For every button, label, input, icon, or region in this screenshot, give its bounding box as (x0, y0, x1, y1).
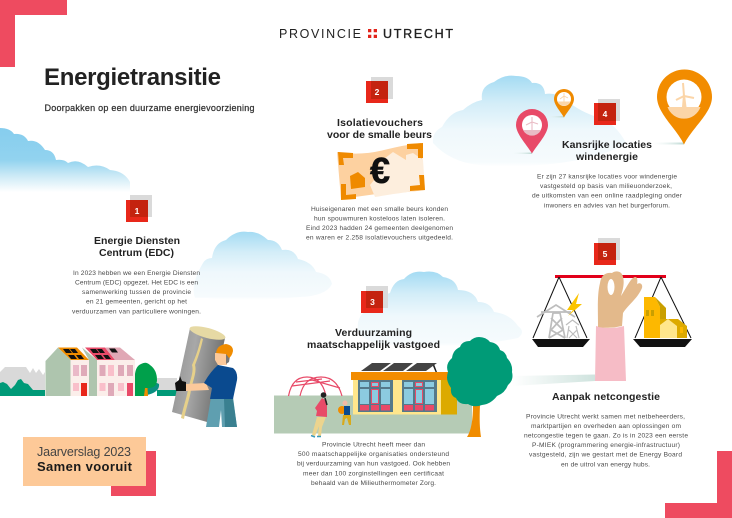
text 3: 500 maatschappelijke organisaties ondersteund (298, 451, 449, 458)
badge 5 (594, 238, 620, 265)
text 4: Er zijn 27 kansrijke locaties voor windenergie (537, 174, 677, 180)
cloud top right (433, 76, 626, 166)
text 2: hun spouwmuren kosteloos laten isoleren. (314, 216, 445, 222)
cloud centre (358, 272, 522, 346)
title: Energietransitie (44, 64, 221, 91)
logo: PROVINCIE (279, 27, 361, 41)
cloud centre left (194, 232, 332, 300)
logo: UTRECHT (383, 27, 453, 41)
logo (279, 27, 453, 41)
footer label: Jaarverslag (23, 437, 156, 496)
text 2 (306, 206, 453, 242)
text 1: Centrum (EDC) opgezet. Het EDC is een (75, 280, 198, 286)
heading 3 (307, 327, 440, 351)
badge 2 (366, 77, 393, 103)
illustration: banknote (337, 143, 425, 200)
heading 3: maatschappelijk vastgoed (307, 339, 440, 351)
text 2: Eind 2023 hadden 24 gemeenten deelgenomen (306, 225, 453, 232)
heading 4 (562, 139, 652, 163)
badge 3: 3 (370, 297, 375, 307)
illustration: worker with insulation roll (172, 323, 237, 427)
text 3: Provincie Utrecht heeft meer dan (322, 442, 425, 448)
text 5 (524, 414, 688, 468)
text 5: Provincie Utrecht werkt samen met netbeheerders, (526, 414, 685, 420)
text 4: vastgesteld op basis van milieuonderzoek, (540, 183, 672, 190)
text 3: bij verduurzaming van hun vastgoed. Ook hebben (297, 460, 450, 468)
heading 2: Isolatievouchers (337, 117, 423, 129)
illustration: banknote: € (370, 150, 390, 191)
text 4: inwoners en advies van het burgerforum. (544, 202, 670, 210)
text 2: Huiseigenaren met een smalle beurs konden (311, 206, 448, 213)
text 5: P-MIEK (programmering energie-infrastructuur) (532, 442, 680, 449)
text 1: verduurzamen van particuliere woningen. (72, 308, 201, 316)
text 4 (532, 174, 683, 210)
text 4: de uitkomsten van een online raadpleging onder (532, 192, 683, 200)
text 1: samenwerking tussen de provincie (82, 289, 191, 296)
text 1 (72, 270, 201, 316)
cloud left (0, 128, 130, 192)
heading 5: Aanpak netcongestie (552, 391, 660, 403)
text 5: vastgesteld, zijn we gestart met de Energy Board (529, 452, 682, 458)
illustration: houses (0, 348, 177, 396)
heading 4: windenergie (575, 151, 638, 163)
text 1: In 2023 hebben we een Energie Diensten (73, 270, 200, 277)
badge 5: 5 (603, 249, 608, 259)
text 3: behaald van de Milieuthermometer Zorg. (311, 480, 436, 487)
icon: red pin (512, 109, 548, 154)
badge 1 (126, 195, 152, 222)
corner accent bottom right (665, 451, 732, 518)
corner accent top left (0, 0, 67, 67)
panel: 5 Aanpak netcongestie (524, 238, 692, 468)
panel: 1 Energie Diensten Centrum (0, 195, 237, 427)
badge 4: 4 (603, 109, 608, 119)
icon: large orange pin (652, 70, 712, 144)
text 3: meer dan 100 zorginstellingen een certificaat (303, 470, 444, 478)
text 5: en de uitrol van energy hubs. (561, 462, 650, 468)
icon: small orange pin (547, 89, 574, 118)
heading 3: Verduurzaming (335, 327, 412, 339)
illustration: school building, playground and tree (274, 337, 595, 437)
text 5: netcongestie tegen te gaan. Zo is in 2023 een eerste (524, 432, 688, 440)
heading 1: Centrum (EDC) (99, 247, 174, 259)
footer label: Jaarverslag: Samen vooruit (37, 459, 133, 474)
badge 3 (361, 286, 388, 313)
heading 2: voor de smalle beurs (327, 129, 432, 141)
illustration: balance scale (532, 271, 692, 381)
text 1: en 21 gemeenten, gericht op het (86, 298, 187, 306)
heading 4: Kansrijke locaties (562, 139, 652, 151)
footer label: Jaarverslag: Jaarverslag 2023 (37, 445, 131, 459)
text 2: en waren er 2.258 isolatievouchers uitgedeeld. (306, 234, 453, 242)
text 5: marktpartijen en overheden aan oplossingen om (531, 423, 682, 430)
badge 4 (594, 99, 620, 125)
subtitle: Doorpakken op een duurzame energievoorziening (44, 103, 254, 113)
badge 1: 1 (135, 206, 140, 216)
heading 1 (94, 235, 180, 259)
heading 1: Energie Diensten (94, 235, 180, 247)
shadow of tree (512, 374, 595, 386)
panel: 2 Isolatievouchers (306, 77, 453, 242)
text 3 (297, 442, 450, 487)
panel: 3 Verduurzaming (274, 286, 595, 487)
panel: 4 Kansrijke locaties (512, 70, 712, 210)
badge 2: 2 (375, 87, 380, 97)
heading 2 (327, 117, 432, 141)
